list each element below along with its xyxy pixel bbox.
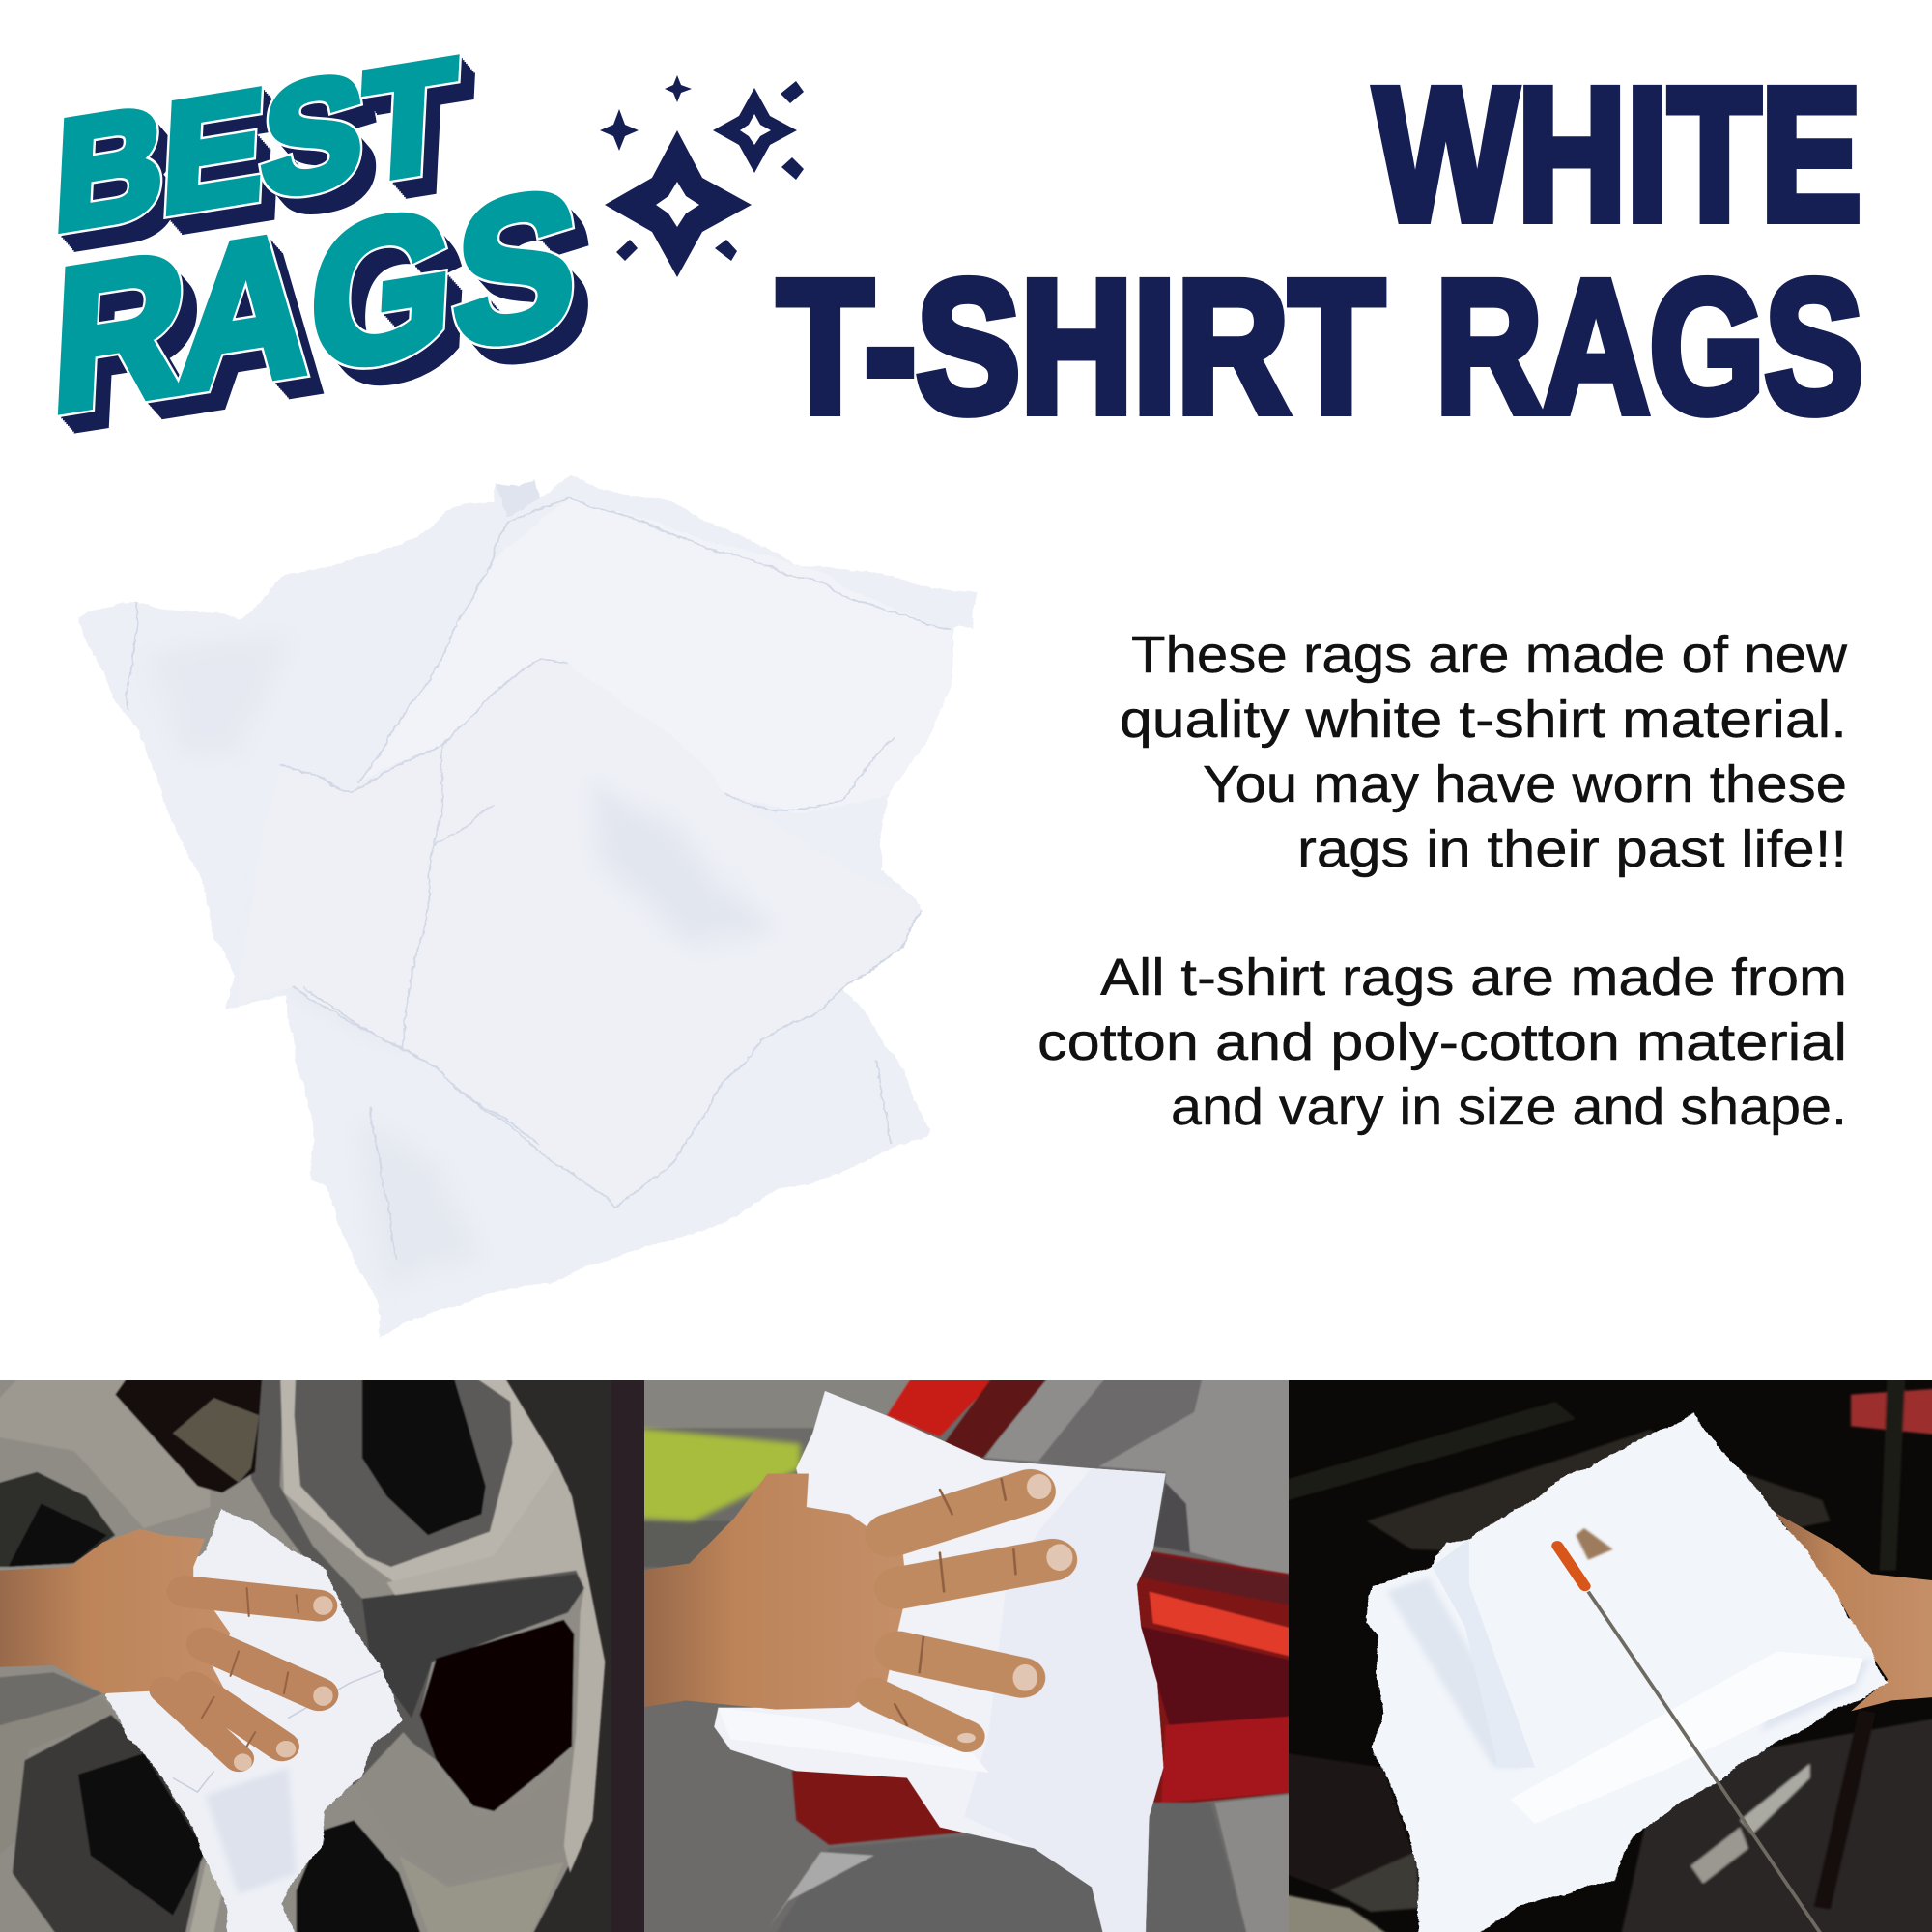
text block: product description: You may have worn these bbox=[1203, 755, 1847, 813]
logo word: BEST: BEST bbox=[59, 36, 466, 272]
logo word: RAGS: RAGS bbox=[48, 147, 582, 455]
logo word: RAGS: RAGS bbox=[49, 149, 583, 457]
logo word: BEST: BEST bbox=[68, 44, 473, 281]
logo word: BEST: BEST bbox=[64, 41, 470, 278]
logo word: BEST: BEST bbox=[51, 26, 458, 263]
logo word: RAGS: RAGS bbox=[58, 157, 591, 466]
logo word: BEST: BEST bbox=[56, 32, 463, 269]
text block: product description: All t-shirt rags are made from bbox=[1100, 949, 1847, 1007]
logo: Best Rags bbox=[47, 24, 599, 476]
photo: wiping a car body bbox=[644, 1380, 1289, 1932]
text block: product description: rags in their past life!! bbox=[1297, 820, 1847, 878]
text block: product description: quality white t-shirt material. bbox=[1120, 691, 1847, 749]
logo word: RAGS: RAGS bbox=[51, 151, 585, 459]
logo word: RAGS: RAGS bbox=[53, 153, 586, 461]
logo word: BEST: BEST bbox=[66, 43, 472, 279]
text block: product description: These rags are made of new bbox=[1131, 626, 1848, 684]
photo: wiping a car wheel bbox=[0, 1359, 650, 1932]
text block: product description bbox=[1037, 626, 1848, 1136]
title bbox=[778, 49, 1863, 452]
logo word: BEST: BEST bbox=[63, 40, 469, 276]
logo word: RAGS: RAGS bbox=[60, 159, 593, 468]
logo word: RAGS: RAGS bbox=[63, 163, 596, 471]
logo word: RAGS: RAGS bbox=[48, 147, 582, 455]
logo word: BEST: BEST bbox=[55, 30, 461, 267]
image: pile of white t-shirt rags bbox=[76, 479, 976, 1334]
text block: product description: cotton and poly-cotton material bbox=[1037, 1013, 1847, 1071]
logo word: RAGS: RAGS bbox=[61, 161, 595, 469]
logo word: BEST: BEST bbox=[61, 38, 468, 274]
logo word: RAGS: RAGS bbox=[56, 156, 590, 464]
icon: sparkles bbox=[600, 75, 804, 277]
logo word: RAGS: RAGS bbox=[65, 165, 598, 473]
logo word: BEST: BEST bbox=[51, 26, 458, 263]
logo word: BEST: BEST bbox=[53, 28, 460, 265]
logo word: RAGS: RAGS bbox=[55, 155, 588, 462]
logo word: BEST: BEST bbox=[58, 34, 465, 270]
text block: product description: and vary in size and shape. bbox=[1171, 1078, 1847, 1136]
photo: wiping an oil dipstick bbox=[1264, 1359, 1932, 1932]
title: T-SHIRT bbox=[778, 242, 1384, 452]
